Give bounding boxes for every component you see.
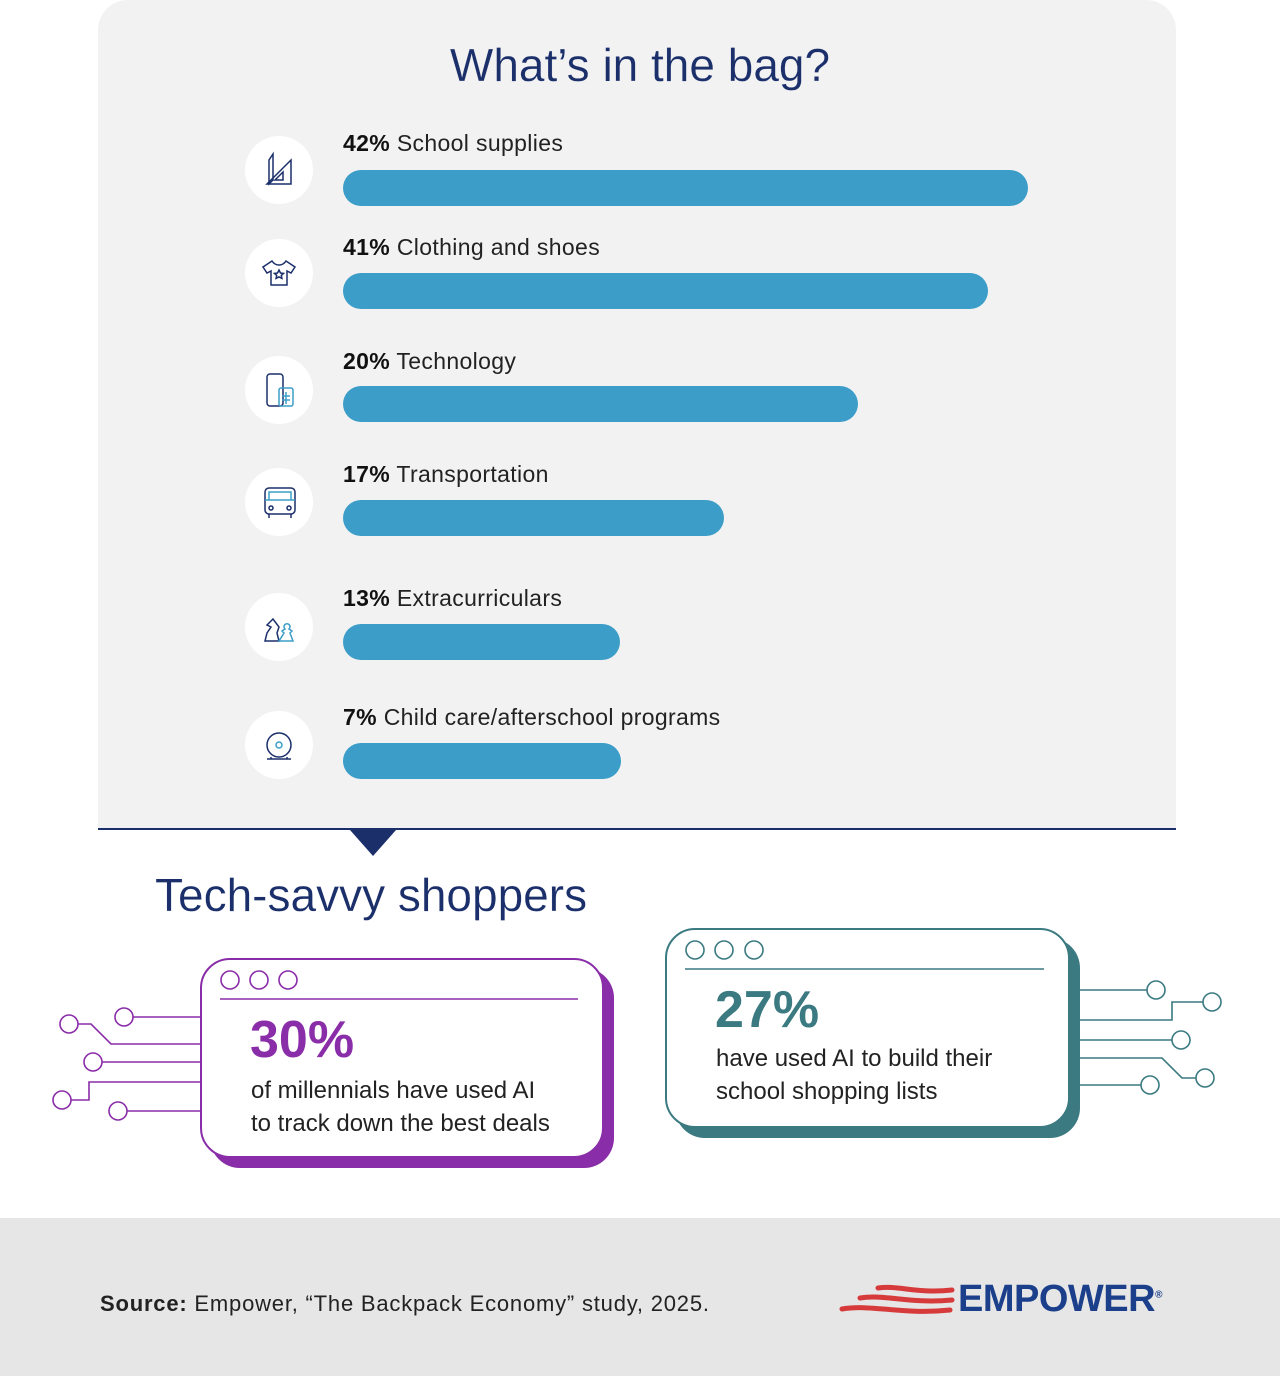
title: What’s in the bag?: [450, 39, 830, 91]
stat 30%: 30%: [250, 1011, 354, 1069]
icon: ruler pencil: [245, 136, 313, 204]
source: Source: Empower, “The Backpack Economy” study, 2025.: [100, 1291, 710, 1316]
card: 30%: [200, 958, 614, 1168]
icon: bell: [245, 711, 313, 779]
text: 17% Transportation: [343, 461, 549, 487]
item 2: [245, 239, 313, 307]
footer: [0, 1218, 1280, 1376]
item 4: [245, 468, 313, 536]
item 6: [245, 711, 313, 779]
text: 7% Child care/afterschool programs: [343, 704, 721, 730]
text 27%: school shopping lists: [716, 1078, 937, 1105]
circuit lines left: [52, 1007, 200, 1121]
icon: bus: [245, 468, 313, 536]
text: 41% Clothing and shoes: [343, 234, 600, 260]
card: 27%: [665, 928, 1080, 1138]
text: 13% Extracurriculars: [343, 585, 562, 611]
item 5: [245, 593, 313, 661]
text 27%: [716, 1045, 992, 1105]
pointer arrow: [350, 830, 396, 856]
icon: t-shirt: [245, 239, 313, 307]
icon: chess: [245, 593, 313, 661]
item 3: [245, 356, 313, 424]
text 30%: to track down the best deals: [251, 1110, 550, 1137]
text 27%: have used AI to build their: [716, 1045, 992, 1072]
panel: bag: [98, 0, 1176, 830]
text 30%: [251, 1077, 550, 1137]
text: 20% Technology: [343, 348, 516, 374]
logo: EMPOWER®: [958, 1278, 1162, 1320]
text: 42% School supplies: [343, 130, 563, 156]
heading: tech-savvy: Tech-savvy shoppers: [155, 869, 587, 921]
logo: [840, 1278, 1162, 1320]
circuit lines right: [1080, 980, 1222, 1095]
icon: phone calculator: [245, 356, 313, 424]
stat 27%: 27%: [715, 981, 819, 1039]
item 1: [245, 136, 313, 204]
text 30%: of millennials have used AI: [251, 1077, 535, 1104]
